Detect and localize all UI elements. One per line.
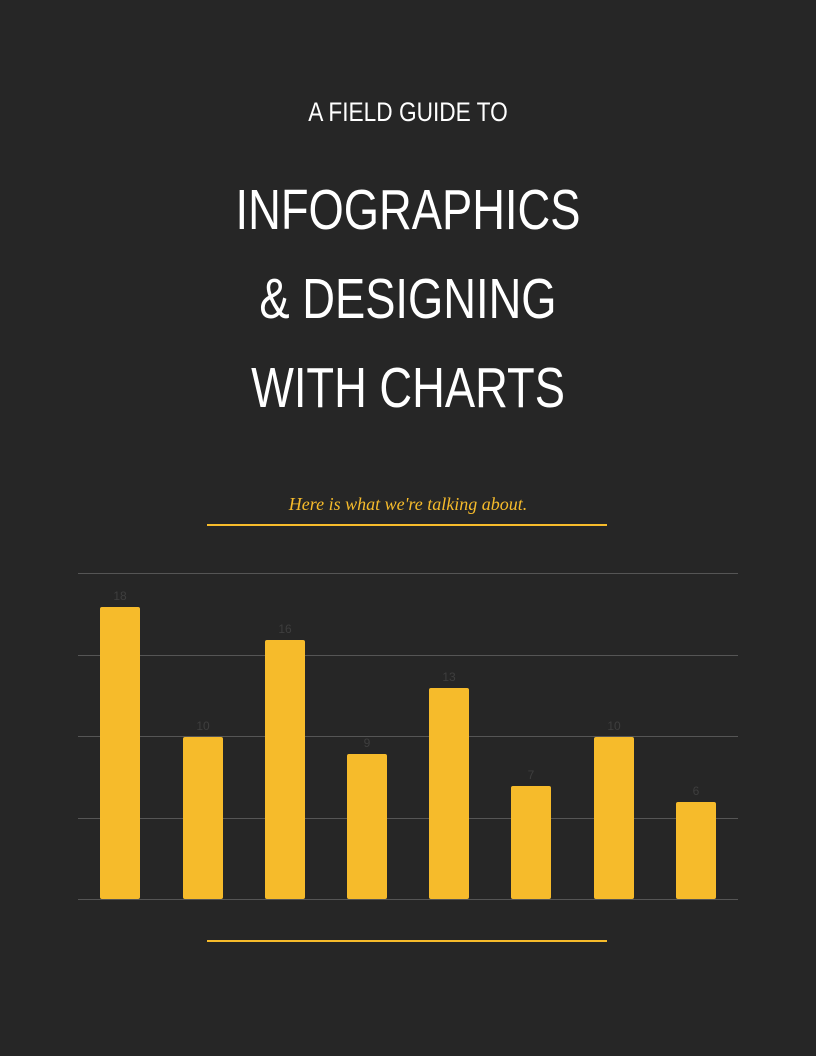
bar chart: 18 [113,589,127,603]
main title: INFOGRAPHICS [236,178,580,242]
bar chart: 16 [278,622,292,636]
main title: WITH CHARTS [251,356,565,420]
main title: & DESIGNING [259,267,557,331]
bottom divider line [207,940,607,942]
bar chart: 10 [607,719,621,733]
subtitle: Here is what we're talking about. [289,494,527,514]
top divider line [207,524,607,526]
bar chart: 13 [442,670,456,684]
bar chart: 6 [693,784,700,798]
bar chart: 9 [364,736,371,750]
bar chart: 7 [528,768,535,782]
bar chart: 10 [196,719,210,733]
kicker heading: A FIELD GUIDE TO [308,97,508,127]
main title [236,178,580,420]
